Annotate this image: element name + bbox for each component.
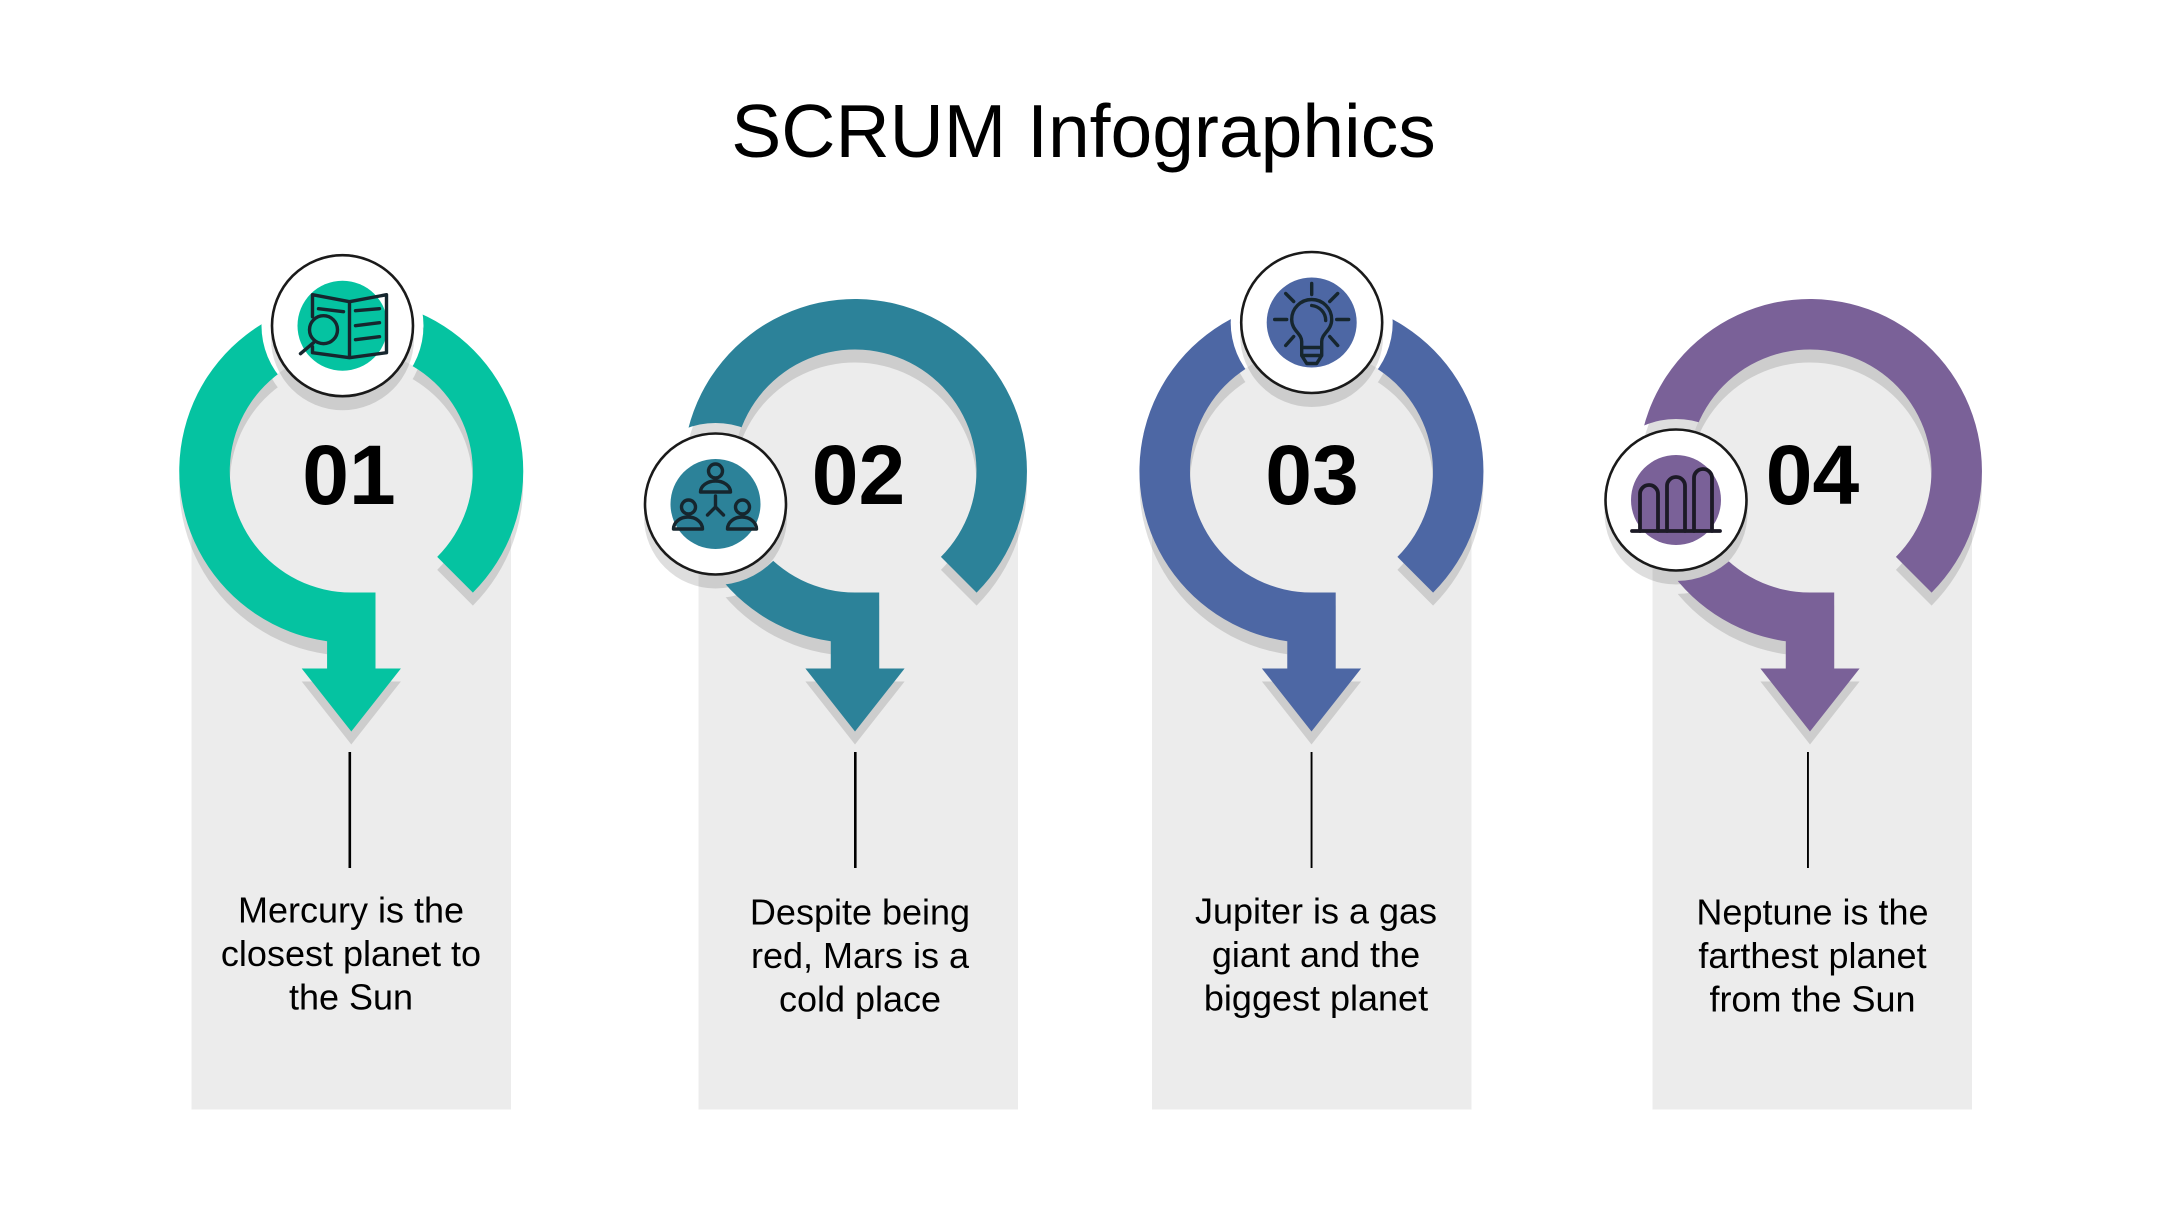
title: SCRUM Infographics xyxy=(731,89,1436,173)
connector line 02 xyxy=(854,752,857,868)
panel: step 04 xyxy=(1604,299,1982,1110)
number 01: 01 xyxy=(302,428,396,522)
text block 01: Mercury is the xyxy=(238,890,464,930)
text block 01: the Sun xyxy=(289,976,413,1018)
number 04: 04 xyxy=(1766,428,1859,522)
icon badge: light bulb xyxy=(1241,252,1382,393)
connector line 01 xyxy=(348,752,351,868)
ring arrow 03 xyxy=(1139,299,1483,732)
panel background 02 xyxy=(698,349,1018,1109)
panel: step 02 xyxy=(644,299,1027,1110)
badge shadow 02 xyxy=(644,446,787,588)
icon badge: arches xyxy=(1606,430,1746,570)
connector line 04 xyxy=(1807,752,1809,868)
panel: step 03 xyxy=(1139,252,1483,1110)
ring arrow 02 xyxy=(683,299,1027,732)
text block 02: red, Mars is a xyxy=(751,935,970,976)
connector line 03 xyxy=(1311,752,1312,868)
number 02: 02 xyxy=(812,428,905,522)
text block 03: biggest planet xyxy=(1204,978,1428,1018)
text block 02: Despite being xyxy=(750,892,970,932)
text block 02: cold place xyxy=(779,978,941,1020)
icon badge: book and magnifier xyxy=(272,255,413,396)
panel: step 01 xyxy=(179,255,523,1110)
text block 04: from the Sun xyxy=(1709,978,1916,1020)
panel background 03 xyxy=(1152,349,1472,1109)
number 03: 03 xyxy=(1265,428,1359,522)
ring arrow shadow 02 xyxy=(690,350,1027,744)
badge shadow 01 xyxy=(271,267,414,410)
ring arrow shadow 01 xyxy=(179,312,523,744)
ring arrow 04 xyxy=(1638,299,1982,732)
text block 03: Jupiter is a gas xyxy=(1195,890,1437,932)
icon badge: team xyxy=(645,434,786,574)
panel background 04 xyxy=(1652,349,1972,1110)
text block 03: giant and the xyxy=(1212,934,1420,975)
ring arrow 01 xyxy=(179,299,523,732)
text block 01: closest planet to xyxy=(221,933,481,974)
ring arrow shadow 04 xyxy=(1645,350,1982,744)
panel background 01 xyxy=(192,349,511,1110)
badge shadow 04 xyxy=(1604,442,1748,584)
badge shadow 03 xyxy=(1240,264,1383,407)
text block 04: Neptune is the xyxy=(1696,892,1929,932)
ring arrow shadow 03 xyxy=(1140,373,1484,744)
text block 04: farthest planet xyxy=(1698,935,1927,976)
